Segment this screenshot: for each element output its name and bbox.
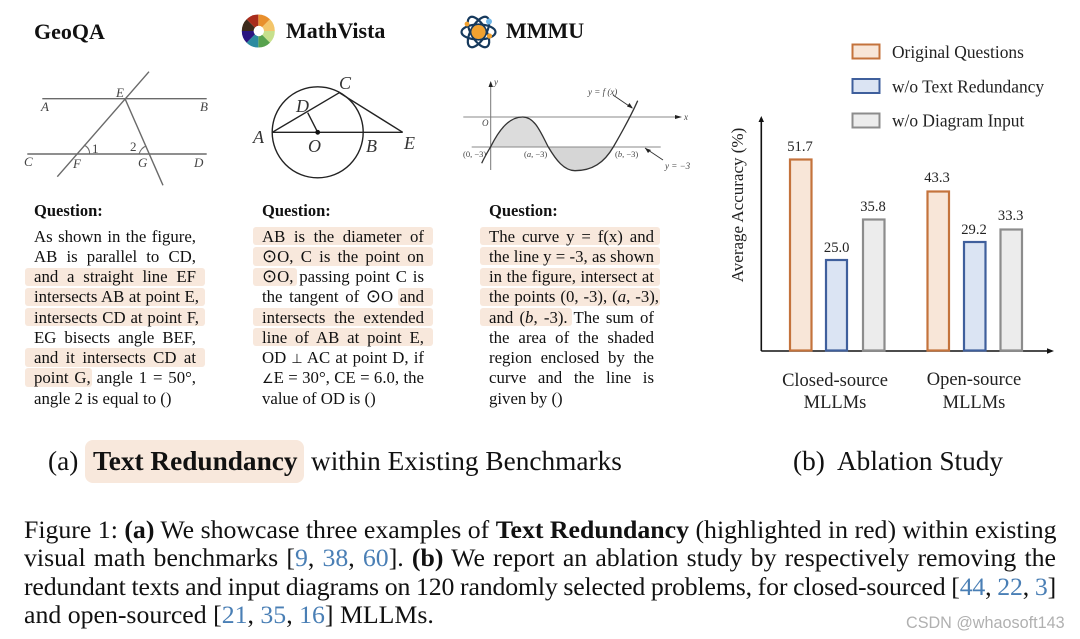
subcaption (a): within Existing Benchmarks bbox=[311, 446, 622, 476]
diagram: GeoQA geometry figure: A bbox=[40, 99, 49, 114]
diagram: MMMU curve figure: y = −3 bbox=[664, 161, 691, 171]
figure caption: and open-sourced [21, 35, 16] MLLMs. bbox=[24, 600, 434, 629]
legend: Original Questions bbox=[892, 42, 1024, 62]
subcaption (b): (b) Ablation Study bbox=[793, 446, 1003, 476]
text block: MMMU question: and (b, -3). The sum of bbox=[489, 308, 654, 327]
y axis title: Average Accuracy (%) bbox=[728, 128, 747, 282]
heading: GeoQA: GeoQA bbox=[34, 19, 105, 44]
diagram: MathVista circle figure: D bbox=[295, 96, 309, 116]
category labels: Open-source bbox=[927, 370, 1021, 390]
legend bbox=[852, 42, 1044, 130]
text block: MathVista question: value of OD is () bbox=[262, 389, 376, 408]
diagram: GeoQA geometry figure: G bbox=[138, 155, 148, 170]
figure caption: visual math benchmarks [9, 38, 60]. (b) We report an ablation study by respectively removing the bbox=[24, 543, 1056, 572]
diagram: MathVista circle figure: E bbox=[403, 133, 415, 153]
text block: MathVista question: Question: bbox=[262, 200, 331, 220]
diagram: GeoQA geometry figure: 2 bbox=[130, 139, 136, 154]
text block: GeoQA question: As shown in the figure, bbox=[34, 227, 196, 246]
text block: MMMU question: curve and the line is bbox=[489, 368, 654, 387]
text block: GeoQA question bbox=[25, 200, 205, 408]
subcaption (a): (a) bbox=[48, 446, 78, 476]
diagram: GeoQA geometry figure: D bbox=[193, 155, 204, 170]
text block: MMMU question: The curve y = f(x) and bbox=[489, 227, 654, 246]
text block: GeoQA question: and a straight line EF bbox=[34, 267, 196, 286]
legend: w/o Diagram Input bbox=[892, 110, 1025, 130]
text block: MMMU question: in the figure, intersect at bbox=[489, 267, 654, 286]
text block: GeoQA question: intersects CD at point F, bbox=[34, 308, 199, 327]
text block: MathVista question: the tangent of ⊙O and bbox=[262, 286, 424, 307]
diagram: GeoQA geometry figure: F bbox=[72, 156, 82, 171]
text block: MathVista question: ∠E = 30°, CE = 6.0, the bbox=[262, 368, 424, 387]
text block: MathVista question: intersects the extended bbox=[262, 308, 424, 327]
figure caption: redundant texts and input diagrams on 120 randomly selected problems, for closed-sourced [44, 22, 3] bbox=[24, 572, 1056, 601]
text block: MMMU question bbox=[480, 200, 660, 408]
text block: MMMU question: given by () bbox=[489, 389, 563, 408]
subcaption (a): Text Redundancy bbox=[93, 446, 298, 476]
text block: GeoQA question: angle 2 is equal to () bbox=[34, 389, 171, 408]
category labels: MLLMs bbox=[804, 393, 866, 413]
diagram: MathVista circle figure: C bbox=[339, 73, 352, 93]
bars bbox=[790, 160, 1022, 350]
value labels: 29.2 bbox=[961, 222, 987, 238]
text block: MMMU question: Question: bbox=[489, 200, 558, 220]
text block: GeoQA question: AB is parallel to CD, bbox=[34, 247, 196, 266]
value labels bbox=[787, 139, 1023, 256]
value labels: 25.0 bbox=[824, 240, 849, 256]
axes bbox=[758, 116, 1054, 354]
category labels bbox=[782, 370, 1021, 413]
diagram: MathVista circle figure: B bbox=[366, 136, 377, 156]
diagram: GeoQA geometry figure: 1 bbox=[92, 141, 98, 156]
text block: MathVista question: ⊙O, C is the point on bbox=[262, 246, 424, 267]
text block: MathVista question: AB is the diameter of bbox=[262, 227, 424, 246]
value labels: 43.3 bbox=[924, 170, 950, 186]
watermark: CSDN @whaosoft143 bbox=[906, 614, 1065, 632]
figure caption: Figure 1: (a) We showcase three examples of Text Redundancy (highlighted in red) within existing bbox=[24, 515, 1057, 544]
heading: MathVista: MathVista bbox=[286, 18, 385, 43]
diagram: GeoQA geometry figure: B bbox=[200, 99, 208, 114]
text block: GeoQA question: and it intersects CD at bbox=[34, 348, 196, 367]
category labels: MLLMs bbox=[943, 393, 1005, 413]
diagram: MMMU curve figure: y bbox=[493, 77, 498, 87]
legend: w/o Text Redundancy bbox=[892, 76, 1044, 96]
text block: MathVista question bbox=[253, 200, 433, 408]
diagram: MMMU curve figure: y = f (x) bbox=[587, 87, 617, 97]
text block: MathVista question: ⊙O, passing point C is bbox=[262, 266, 424, 287]
diagram: GeoQA geometry figure: C bbox=[24, 154, 33, 169]
text block: MMMU question: region enclosed by the bbox=[489, 348, 654, 367]
subcaption (a) bbox=[48, 440, 622, 483]
figure caption bbox=[24, 515, 1057, 629]
diagram: MMMU curve figure: (a, −3) bbox=[524, 149, 547, 159]
text block: MathVista question: line of AB at point E, bbox=[262, 328, 424, 347]
text block: MathVista question: OD ⊥ AC at point D, if bbox=[262, 348, 424, 367]
value labels: 51.7 bbox=[787, 139, 813, 155]
value labels: 33.3 bbox=[998, 208, 1023, 224]
text block: MMMU question: the area of the shaded bbox=[489, 328, 654, 347]
text block: MMMU question: the line y = -3, as shown bbox=[489, 247, 654, 266]
diagram: MMMU curve figure: (b, −3) bbox=[615, 149, 638, 159]
diagram: MMMU curve figure: x bbox=[683, 112, 688, 122]
value labels: 35.8 bbox=[860, 199, 886, 215]
text block: GeoQA question: point G, angle 1 = 50°, bbox=[34, 368, 196, 387]
diagram: MMMU curve figure: (0, −3) bbox=[463, 149, 486, 159]
diagram: MathVista circle figure: A bbox=[252, 127, 265, 147]
diagram: MathVista circle figure: O bbox=[308, 136, 321, 156]
category labels: Closed-source bbox=[782, 371, 888, 391]
text block: GeoQA question: intersects AB at point E, bbox=[34, 287, 199, 306]
heading: MMMU: MMMU bbox=[506, 18, 584, 43]
text block: MMMU question: the points (0, -3), (a, -3), bbox=[489, 287, 659, 306]
text block: GeoQA question: EG bisects angle BEF, bbox=[34, 328, 196, 347]
text block: GeoQA question: Question: bbox=[34, 200, 103, 220]
diagram: GeoQA geometry figure: E bbox=[115, 85, 124, 100]
diagram: MMMU curve figure: O bbox=[482, 118, 489, 128]
